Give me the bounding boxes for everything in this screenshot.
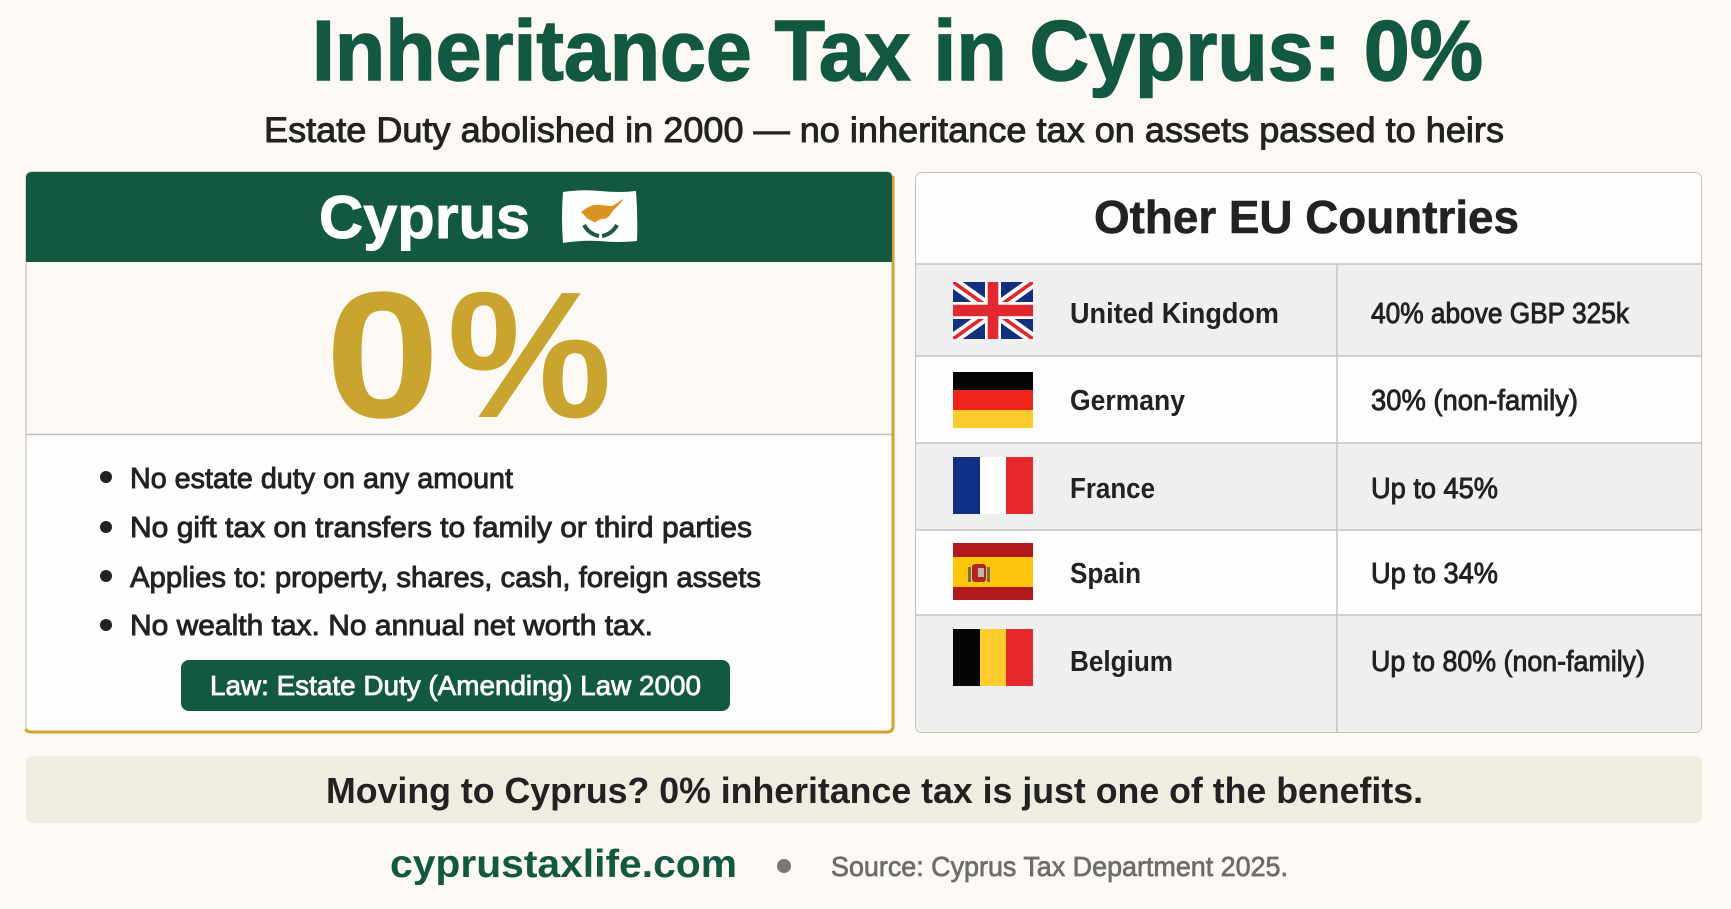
heading: Cyprus: Cyprus (319, 184, 530, 251)
panel: Other EU Countries (916, 172, 1702, 732)
icon: UK flag (953, 282, 1033, 339)
row: Spain: Up to 34% (1371, 558, 1498, 590)
law badge: Law: Estate Duty (Amending) Law 2000 (210, 670, 701, 701)
row: United Kingdom: United Kingdom (1070, 298, 1279, 330)
row: France: France (1070, 473, 1155, 505)
row: Spain (953, 543, 1498, 600)
row: France (953, 457, 1498, 514)
bullet list: No estate duty on any amount (130, 463, 513, 495)
website: cyprustaxlife.com (390, 843, 737, 886)
row: United Kingdom: 40% above GBP 325k (1371, 298, 1629, 330)
row: Germany: Germany (1070, 385, 1185, 417)
row: Belgium (953, 629, 1645, 686)
big rate: 0%: 0 (325, 255, 440, 456)
panel: Cyprus (26, 172, 893, 732)
source note: Source: Cyprus Tax Department 2025. (831, 851, 1288, 882)
icon: Germany flag (953, 372, 1033, 428)
bullet list: No wealth tax. No annual net worth tax. (130, 610, 653, 642)
row: Spain: Spain (1070, 558, 1141, 590)
footer (390, 843, 1288, 886)
callout banner: Moving to Cyprus? 0% inheritance tax is just one of the benefits. (326, 770, 1423, 811)
big rate: 0% (325, 255, 612, 456)
bullet list: Applies to: property, shares, cash, foreign assets (130, 562, 761, 594)
row: Germany: 30% (non-family) (1371, 385, 1578, 417)
callout banner (26, 756, 1702, 823)
icon: Cyprus flag (562, 190, 637, 243)
big rate: 0%: % (447, 255, 612, 456)
icon: France flag (953, 457, 1033, 514)
law badge (181, 660, 730, 711)
subtitle: Estate Duty abolished in 2000 — no inheritance tax on assets passed to heirs (264, 111, 1504, 150)
heading: Other EU Countries: Other EU Countries (1094, 191, 1519, 243)
row: United Kingdom (953, 282, 1629, 339)
icon: Belgium flag (953, 629, 1033, 686)
icon: Spain flag (953, 543, 1033, 600)
row: Belgium: Belgium (1070, 646, 1173, 678)
row: Germany (953, 372, 1578, 428)
row: France: Up to 45% (1371, 473, 1498, 505)
bullet list: No gift tax on transfers to family or third parties (130, 512, 752, 544)
panel header: Cyprus (26, 172, 892, 262)
bullet list (100, 463, 761, 642)
row: Belgium: Up to 80% (non-family) (1371, 646, 1645, 678)
title: Inheritance Tax in Cyprus: 0% (312, 4, 1483, 99)
